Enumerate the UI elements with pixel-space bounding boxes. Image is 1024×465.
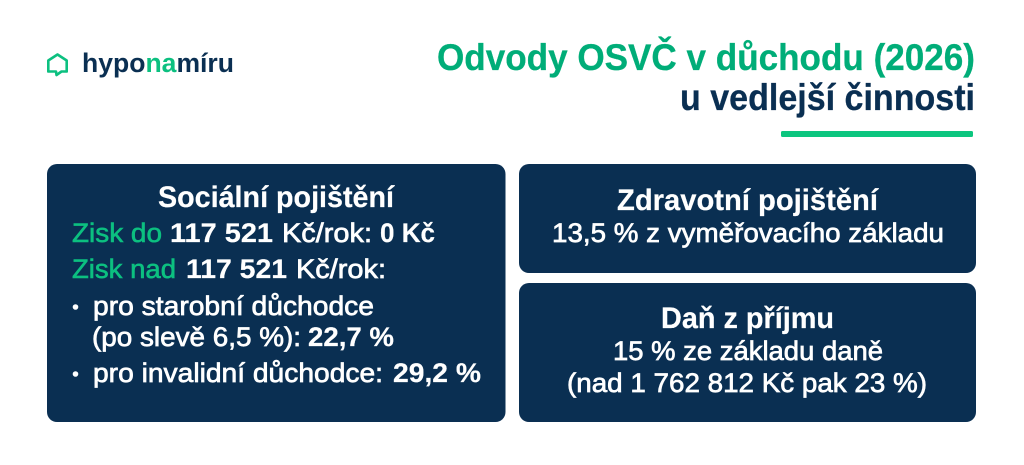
line: profit up to threshold: Zisk do xyxy=(72,218,162,248)
title underline xyxy=(781,131,973,137)
panel: health insurance xyxy=(519,164,976,273)
logo xyxy=(48,48,234,78)
title line 2: u vedlejší činnosti xyxy=(680,77,975,118)
panel background xyxy=(519,283,976,422)
bullet: old-age pensioners: pro starobní důchodce xyxy=(93,291,374,321)
bullet: disability pensioners: pro invalidní důchodce: xyxy=(93,358,383,388)
income tax rate: 15 % ze základu daně xyxy=(613,336,883,366)
line: profit above threshold xyxy=(72,254,386,284)
bullet: old-age pensioners: 22,7 % xyxy=(308,322,394,352)
title xyxy=(437,36,975,118)
panel: social insurance xyxy=(47,164,506,422)
line: profit above threshold: 117 521 xyxy=(186,254,287,284)
heading: social insurance: Sociální pojištění xyxy=(158,181,396,214)
line: profit above threshold: Kč/rok: xyxy=(296,254,386,284)
title line 1: Odvody OSVČ v důchodu (2026) xyxy=(437,36,975,78)
logo wordmark: hyponamíru xyxy=(82,48,234,78)
heading: health insurance: Zdravotní pojištění xyxy=(617,184,880,217)
line: profit up to threshold xyxy=(72,218,435,248)
panel background xyxy=(519,164,976,273)
line: profit up to threshold: Kč/rok: xyxy=(282,218,372,248)
line: profit up to threshold: 0 Kč xyxy=(380,218,435,248)
line: profit above threshold: Zisk nad xyxy=(72,254,176,284)
icon: house speech bubble xyxy=(48,54,67,75)
bullet: old-age pensioners xyxy=(73,291,394,352)
bullet: disability pensioners xyxy=(73,358,481,388)
line: profit up to threshold: 117 521 xyxy=(170,218,273,248)
income tax upper threshold: (nad 1 762 812 Kč pak 23 %) xyxy=(567,368,927,398)
panel background xyxy=(47,164,506,422)
heading: income tax: Daň z příjmu xyxy=(661,302,834,335)
bullet: disability pensioners: 29,2 % xyxy=(393,358,481,388)
panel: income tax xyxy=(519,283,976,422)
health insurance rate: 13,5 % z vyměřovacího základu xyxy=(552,218,944,248)
bullet: old-age pensioners: (po slevě 6,5 %): xyxy=(92,322,301,352)
